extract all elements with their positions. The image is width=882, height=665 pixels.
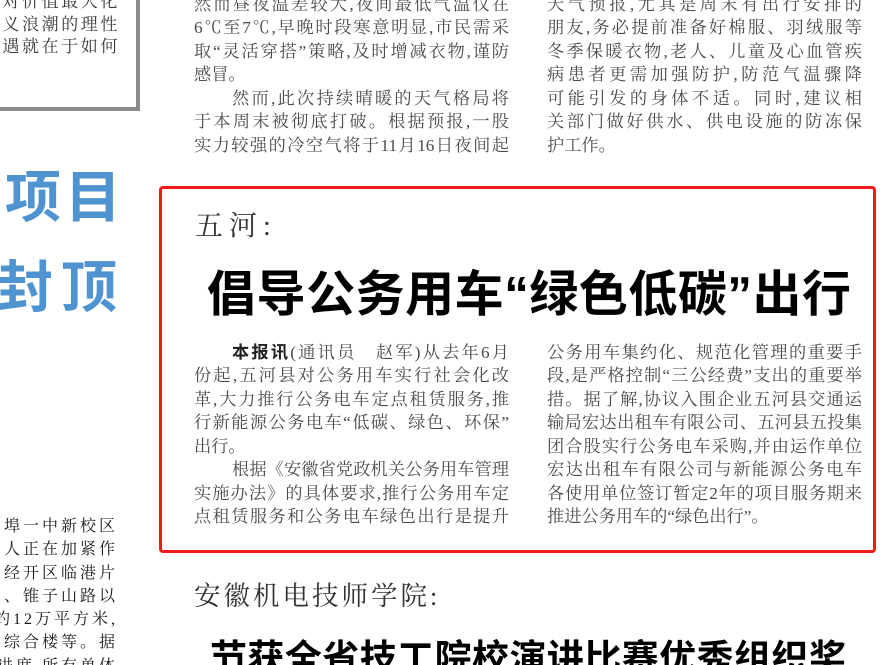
text: lower left article, clipped at left edge: 人正在加紧作 xyxy=(4,541,118,558)
text: highlighted article column 2: 措。据了解,协议入围企业五河县交通运 xyxy=(547,390,862,409)
text: highlighted article column 1: 点租赁服务和公务电车绿色出行是提升 xyxy=(194,507,509,526)
text: weather article column 1: 6℃至7℃,早晚时段寒意明显,市民需采 xyxy=(194,18,509,37)
text: weather article column 2 xyxy=(547,0,862,155)
text: highlighted article column 1: 行新能源公务电车“低碳、绿色、环保” xyxy=(194,413,509,432)
text: highlighted article column 2 xyxy=(547,343,862,526)
text: lower left article, clipped at left edge: 埠一中新校区 xyxy=(4,518,118,535)
text: weather article column 1: 然而,此次持续晴暖的天气格局将 xyxy=(232,89,509,108)
heading: 五河 kicker: 五河: xyxy=(195,211,277,242)
text: highlighted article column 2: 公务用车集约化、规范化管理的重要手 xyxy=(547,343,862,362)
text: highlighted article column 2: 段,是严格控制“三公经费”支出的重要举 xyxy=(547,366,862,385)
text: highlighted article column 1: 本报讯(通讯员 赵军)从去年6月 xyxy=(232,342,509,362)
text: weather article column 2: 护工作。 xyxy=(547,136,616,155)
text: lower left article, clipped at left edge: 综合楼等。据 xyxy=(4,634,118,651)
text: highlighted article column 1 xyxy=(194,342,509,526)
panel: red highlighted article xyxy=(159,186,876,553)
panel: clipped commentary box, top left xyxy=(0,0,140,111)
text: weather article column 1: 取“灵活穿搭”策略,及时增减衣物,谨防 xyxy=(194,42,509,61)
text: lower left article, clipped at left edge: 经开区临港片 xyxy=(4,565,118,582)
heading: 安徽机电技师学院 kicker: 安徽机电技师学院: xyxy=(194,581,440,611)
text: weather article column 1: 实力较强的冷空气将于11月16日夜间起 xyxy=(194,136,509,155)
text: highlighted article column 2: 各使用单位签订暂定2年的项目服务期来 xyxy=(547,484,862,503)
text: weather article column 1 xyxy=(194,0,509,155)
text: highlighted article column 2: 宏达出租车有限公司与新能源公务电车 xyxy=(547,460,862,479)
text: weather article column 1: 感冒。 xyxy=(194,65,246,84)
text: weather article column 2: 病患者更需加强防护,防范气温骤降 xyxy=(547,65,862,84)
text: weather article column 2: 朋友,务必提前准备好棉服、羽绒服等 xyxy=(547,18,862,37)
text: highlighted article column 1: 出行。 xyxy=(194,437,246,456)
text: weather article column 2: 关部门做好供水、供电设施的防冻保 xyxy=(547,112,862,131)
text: weather article column 2: 冬季保暖衣物,老人、儿童及心血管疾 xyxy=(547,42,862,61)
title: main article headline: 倡导公务用车“绿色低碳”出行 xyxy=(207,268,851,322)
text: highlighted article column 1: 份起,五河县对公务用车实行社会化改 xyxy=(194,366,509,385)
text: highlighted article column 1: 革,大力推行公务电车定点租赁服务,推 xyxy=(194,390,509,409)
text: weather article column 2: 可能引发的身体不适。同时,建议相 xyxy=(547,89,862,108)
text: highlighted article column 1: 实施办法》的具体要求,推行公务用车定 xyxy=(194,484,509,503)
text: highlighted article column 2: 输局宏达出租车有限公司、五河县五投集 xyxy=(547,413,862,432)
text: highlighted article column 1: 根据《安徽省党政机关公务用车管理 xyxy=(232,460,509,479)
text: lower left article, clipped at left edge xyxy=(0,517,118,665)
text: highlighted article column 2: 推进公务用车的“绿色出行”。 xyxy=(547,507,769,526)
heading: blue headline, clipped at left edge xyxy=(0,160,120,324)
text: weather article column 1: 于本周末被彻底打破。根据预报,一股 xyxy=(194,112,509,131)
text: commentary box lines xyxy=(0,0,120,56)
text: highlighted article column 2: 团合股实行公务电车采购,并由运作单位 xyxy=(547,437,862,456)
